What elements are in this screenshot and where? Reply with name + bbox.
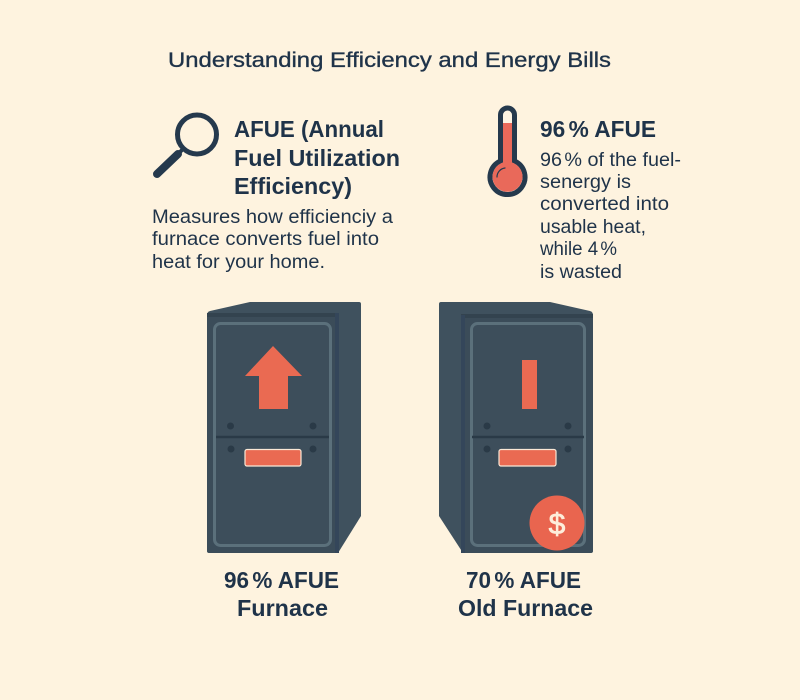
icon: magnifying glass	[157, 115, 216, 174]
label: 70 % AFUE Old Furnace	[458, 567, 593, 621]
text block: 96 % explanation: usable heat,	[540, 217, 646, 238]
label: 96 % AFUE Furnace	[224, 567, 339, 621]
text block: AFUE description	[152, 207, 393, 273]
label: 96 % AFUE Furnace: 96 % AFUE	[224, 567, 339, 593]
text block: 96 % explanation: converted into	[540, 194, 669, 215]
heading: AFUE definition: Fuel Utilization	[234, 145, 400, 171]
indicator slot	[245, 450, 301, 466]
icon: dollar coin	[530, 496, 584, 550]
text block: 96 % explanation: is wasted	[540, 262, 622, 283]
heading: AFUE definition: Efficiency)	[234, 173, 352, 199]
text block: AFUE description: heat for your home.	[152, 252, 325, 273]
text block: 96 % explanation	[539, 150, 681, 283]
text block: 96 % explanation: 96 % of the fuel-	[540, 150, 681, 171]
text block: 96 % explanation: while 4 %	[539, 239, 617, 260]
text block: 96 % explanation: senergy is	[540, 172, 631, 193]
title: Understanding Efficiency and Energy Bills	[168, 49, 611, 72]
heading: 96 % AFUE: 96 % AFUE	[540, 116, 656, 142]
furnace: 96 % AFUE	[207, 302, 361, 553]
heading: AFUE definition	[234, 116, 400, 199]
icon: thermometer	[490, 108, 525, 195]
label: 96 % AFUE Furnace: Furnace	[237, 595, 328, 621]
text block: AFUE description: Measures how efficienciy a	[152, 207, 393, 228]
indicator slot	[499, 450, 556, 466]
text block: AFUE description: furnace converts fuel into	[152, 229, 379, 250]
label: 70 % AFUE Old Furnace: Old Furnace	[458, 595, 593, 621]
icon: small bar	[522, 360, 537, 409]
furnace: 70 % AFUE old	[439, 302, 593, 553]
label: 70 % AFUE Old Furnace: 70 % AFUE	[466, 567, 581, 593]
icon: up arrow	[245, 346, 302, 409]
heading: AFUE definition: AFUE (Annual	[234, 116, 384, 142]
icon: dollar coin: $	[549, 508, 566, 541]
